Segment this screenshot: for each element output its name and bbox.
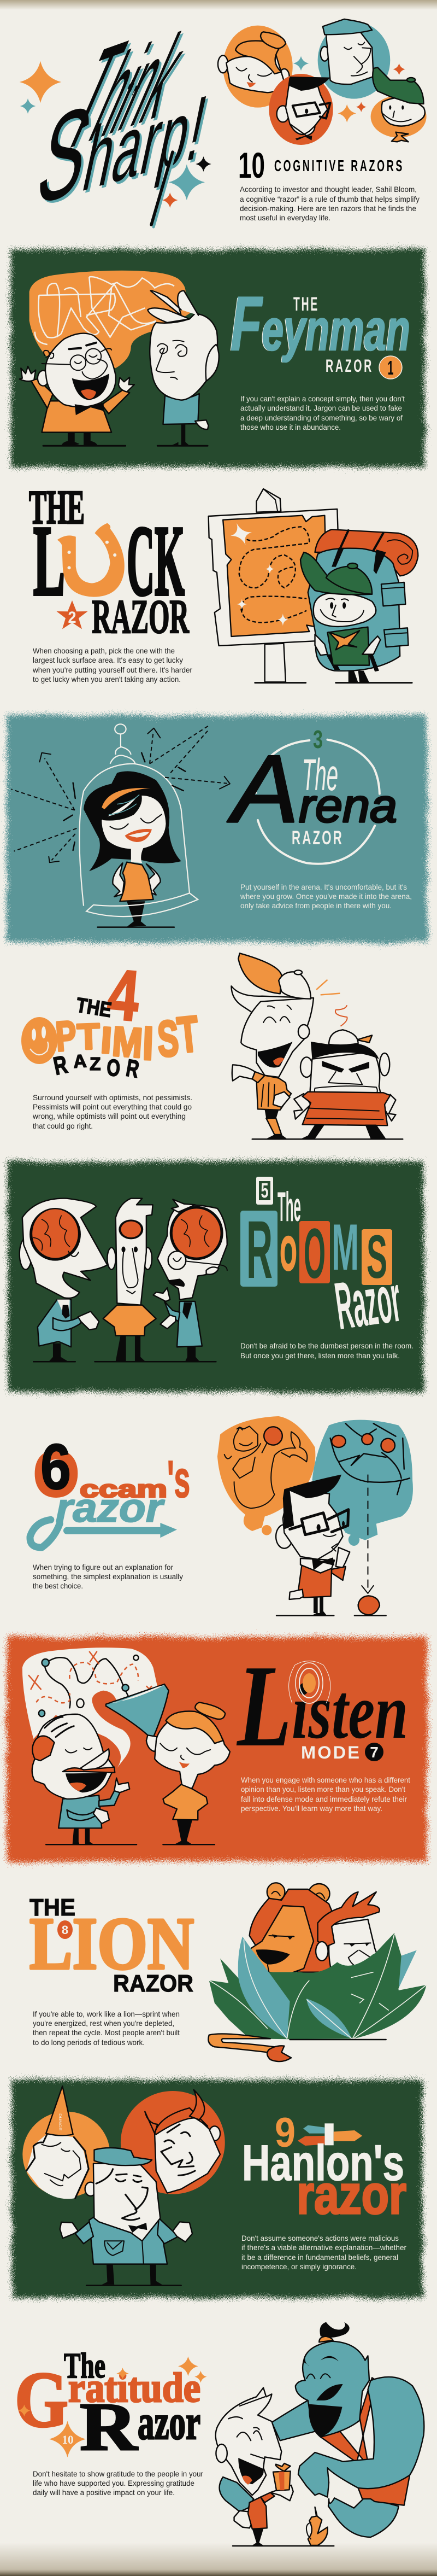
text block: Rooms description: Don't be afraid to be the dumbest person in the room. xyxy=(240,1341,414,1350)
heading: The 4 Optimist Razor: R xyxy=(124,1054,141,1083)
text block: Luck description: largest luck surface area. It's easy to get lucky xyxy=(33,656,183,664)
panel: Hanlon's razor xyxy=(12,2080,423,2298)
heading: 10 cognitive razors xyxy=(238,145,404,185)
heading letters: Optimist: P xyxy=(54,1013,78,1060)
heading: The Lion Razor: RAZOR xyxy=(113,1970,193,1997)
panel: the Luck razor xyxy=(29,481,418,684)
heading: The Gratitude Razor: ratitude xyxy=(68,2365,200,2411)
badge: number 7 xyxy=(365,1743,383,1761)
text block: intro: most useful in everyday life. xyxy=(240,213,330,222)
badge: star number 2 xyxy=(57,600,87,629)
panel background xyxy=(8,1161,424,1392)
heading: The Arena Razor: RAZOR xyxy=(292,827,344,849)
text block: Feynman description: If you can't explain a concept simply, then you don't xyxy=(240,394,405,403)
text block: Listen description: perspective. You'll learn way more that way. xyxy=(241,1804,382,1813)
text block: Hanlon description: it be a difference in fundamental beliefs, general xyxy=(241,2253,398,2262)
heading: The Feynman Razor: RAZOR xyxy=(326,356,374,376)
illustration: thought bubbles, man with glasses, apple xyxy=(217,1416,413,1616)
text block: Hanlon description: Don't assume someone's actions were malicious xyxy=(241,2234,399,2242)
heading: 10 cognitive razors: 10 xyxy=(238,145,265,185)
heading: The Arena Razor: Arena xyxy=(227,736,397,843)
heading: The Lion Razor: LION xyxy=(29,1903,194,1985)
icon: signpost xyxy=(298,2123,362,2146)
text block: Listen description: When you engage with someone who has a different xyxy=(241,1775,410,1784)
text block: Hanlon description xyxy=(241,2234,406,2271)
illustration: stars and four faces xyxy=(20,19,427,208)
badge: number 8: 8 xyxy=(62,1923,68,1937)
heading: The Gratitude Razor xyxy=(15,2346,207,2465)
illustration: dunce, devil and shrugging man xyxy=(22,2086,225,2286)
heading: The Arena Razor: 3 xyxy=(313,725,323,753)
panel: the Rooms razor xyxy=(8,1161,424,1392)
text block: intro: decision-making. Here are ten razors that he finds the xyxy=(240,204,416,213)
text block: Luck description: when you're putting yourself out there. It's harder xyxy=(32,665,192,674)
heading: Listen Mode 7: L xyxy=(236,1640,292,1771)
heading: The 4 Optimist Razor: Z xyxy=(90,1054,101,1074)
icon: woman face xyxy=(218,26,293,108)
heading: The Luck Razor xyxy=(29,481,190,644)
text block: Gratitude description: Don't hesitate to show gratitude to the people in your xyxy=(33,2469,203,2478)
text block: Lion description: then repeat the cycle. Most people aren't built xyxy=(33,2028,180,2037)
text block: Optimist description: wrong, while optimists will point out everything xyxy=(32,1112,186,1120)
heading: 6 Occam's Razor: 's xyxy=(167,1450,190,1509)
badge: number 7: 7 xyxy=(370,1744,379,1761)
heading: 5 The Rooms Razor: O xyxy=(304,1213,326,1293)
panel background xyxy=(7,1637,427,1861)
decorative descender of the p xyxy=(153,153,175,227)
heading: 6 Occam's Razor: razor xyxy=(56,1485,166,1531)
text block: Feynman description: those who use it in abundance. xyxy=(240,423,341,431)
text block: Listen description xyxy=(241,1775,410,1813)
icon: smiley in letter O xyxy=(30,1026,48,1055)
text block: Hanlon description: incompetence, or simply ignorance. xyxy=(241,2262,357,2271)
panel: the Gratitude razor xyxy=(15,2322,424,2546)
heading: 9 Hanlon's Razor xyxy=(242,2110,406,2225)
text block: Feynman description: a deep understanding of something, so be wary of xyxy=(240,413,403,422)
panel: the Feynman razor xyxy=(11,249,425,467)
badge: number 1 xyxy=(379,356,402,379)
icon: scout face xyxy=(371,67,427,142)
text block: Gratitude description: daily will have a positive impact on your life. xyxy=(33,2488,175,2497)
text block: Luck description: When choosing a path, pick the one with the xyxy=(33,646,175,655)
illustration: professor and confused man xyxy=(20,271,219,446)
icon: target rings xyxy=(289,1661,330,1703)
text block: Arena description: Put yourself in the arena. It's uncomfortable, but it's xyxy=(240,883,407,891)
text block: Occam description xyxy=(33,1563,183,1590)
heading: 5 The Rooms Razor xyxy=(240,1177,405,1344)
text block: Optimist description: Surround yourself with optimists, not pessimists. xyxy=(33,1093,192,1102)
text block: Hanlon description: if there's a viable alternative explanation—whether xyxy=(241,2243,406,2252)
illustration: dunce, devil and shrugging man: DUNCE xyxy=(58,2113,62,2130)
heading: The 4 Optimist Razor: A xyxy=(73,1051,87,1072)
icon: man with cap face xyxy=(318,19,390,99)
text block: Luck description xyxy=(32,646,192,684)
panel: the Lion razor xyxy=(29,1883,427,2061)
heading: The 4 Optimist Razor: 4 xyxy=(105,954,143,1036)
panel: the Luck razor: CK xyxy=(127,505,185,616)
heading: 5 The Rooms Razor: O xyxy=(280,1228,297,1280)
badge: number 5: 5 xyxy=(261,1179,269,1202)
illustration: man speaking, funnel, woman listening xyxy=(22,1648,230,1844)
text block: Optimist description xyxy=(32,1093,192,1130)
title: Think Sharp!: Sharp! xyxy=(29,44,225,235)
text block: Optimist description: that could go right. xyxy=(33,1121,93,1130)
illustration: woman in a bell jar with arrows xyxy=(11,724,230,927)
title: Think Sharp!: Sharp! xyxy=(27,42,223,232)
illustration: optimist and pessimist xyxy=(231,953,403,1139)
panel: Occam's razor xyxy=(30,1416,413,1616)
title: Think Sharp!: Think xyxy=(45,0,213,183)
heading: The Lion Razor: THE xyxy=(29,1894,75,1921)
heading: The Gratitude Razor: R xyxy=(80,2390,138,2465)
badge: number 1: 1 xyxy=(388,357,393,379)
icon: glasses man face xyxy=(269,74,333,145)
heading: The 4 Optimist Razor xyxy=(22,954,202,1083)
heading: The Gratitude Razor: The xyxy=(64,2346,105,2386)
text block: Gratitude description: life who have supported you. Expressing gratitude xyxy=(33,2479,194,2487)
heading: The Gratitude Razor: G xyxy=(15,2356,68,2444)
badge: number 10: 10 xyxy=(62,2433,73,2446)
heading: The 4 Optimist Razor: THE xyxy=(75,994,113,1022)
text block: Optimist description: Pessimists will point out everything that could go xyxy=(33,1102,192,1111)
illustration: signpost, map and scout with backpack xyxy=(209,489,418,683)
heading: 9 Hanlon's Razor: 9 xyxy=(275,2110,296,2156)
heading: 5 The Rooms Razor: The xyxy=(277,1184,301,1230)
text block: Gratitude description xyxy=(33,2469,203,2497)
panel: the Arena razor xyxy=(7,715,427,942)
heading: The Luck Razor: L xyxy=(33,505,65,616)
heading letters: Optimist: T xyxy=(175,1005,202,1064)
illustration: lion and man in leaves xyxy=(208,1883,427,2061)
heading: 5 The Rooms Razor: M xyxy=(332,1211,359,1284)
text block: Luck description: to get lucky when you aren't taking any action. xyxy=(33,675,181,684)
text block: intro: a cognitive “razor” is a rule of thumb that helps simplify xyxy=(240,195,420,203)
heading: The Feynman Razor: THE xyxy=(293,294,319,315)
heading: Listen Mode 7 xyxy=(236,1640,408,1771)
heading: The Gratitude Razor: azor xyxy=(138,2396,200,2450)
text block: Feynman description: actually understand it. Jargon can be used to fake xyxy=(240,404,402,412)
heading: 5 The Rooms Razor: R xyxy=(246,1204,273,1295)
text block: Lion description: If you're able to, work like a lion—sprint when xyxy=(33,2010,180,2018)
heading: The Arena Razor: The xyxy=(302,750,338,800)
heading letters: Optimist: S xyxy=(156,1010,180,1067)
icons: sparkle stars xyxy=(18,2356,207,2457)
text block: Arena description xyxy=(240,883,412,910)
heading: 6 Occam's Razor: ccam xyxy=(80,1476,167,1503)
text block: Lion description: you're energized, rest when you're depleted, xyxy=(33,2019,174,2028)
panel background xyxy=(7,715,427,942)
text block: intro: According to investor and thought leader, Sahil Bloom, xyxy=(240,185,417,194)
text block: Occam description: When trying to figure out an explanation for xyxy=(33,1563,173,1572)
heading letters: Optimist: I xyxy=(99,1019,113,1061)
title: Think Sharp!: Think xyxy=(48,0,215,185)
heading: 5 The Rooms Razor: S xyxy=(367,1223,387,1291)
section: header xyxy=(20,0,427,235)
text block: Rooms description: But once you get there, listen more than you talk. xyxy=(240,1351,400,1360)
illustration: genie and smiling man with gift xyxy=(216,2322,424,2546)
heading letters: Optimist: M xyxy=(111,1019,144,1067)
heading: Listen Mode 7: MODE xyxy=(301,1743,361,1762)
text block: Listen description: opinion than you, listen more than you speak. Don't xyxy=(241,1785,405,1794)
heading: 6 Occam's Razor: O xyxy=(33,1438,79,1510)
heading: 6 Occam's Razor: 6 xyxy=(40,1431,71,1503)
heading: 6 Occam's Razor xyxy=(33,1431,190,1531)
heading letters: Optimist: I xyxy=(141,1017,155,1070)
text block: Occam description: the best choice. xyxy=(33,1581,83,1590)
heading letters: Optimist: O xyxy=(22,1007,56,1074)
arrow: razor swash xyxy=(30,1520,177,1547)
panel: Listen mode xyxy=(7,1637,427,1861)
badge: number 8 xyxy=(57,1920,73,1939)
title: Think Sharp! xyxy=(27,0,225,235)
heading: The Luck Razor: THE xyxy=(29,481,85,534)
text block: Rooms description xyxy=(240,1341,414,1360)
text block: Arena description: only take advice from people in there with you. xyxy=(240,901,392,910)
badge: number 5 xyxy=(256,1177,273,1205)
text block: Arena description: where you grow. Once you've made it into the arena, xyxy=(240,892,412,901)
heading: The 4 Optimist Razor: R xyxy=(51,1050,70,1080)
panel background xyxy=(11,249,425,467)
heading: 9 Hanlon's Razor: razor xyxy=(297,2164,406,2225)
badge: star number 2: 2 xyxy=(68,609,76,627)
text block: Lion description: to do long periods of tedious work. xyxy=(33,2038,145,2047)
heading: The Luck Razor: RAZOR xyxy=(92,591,190,644)
icon: horseshoe letter U xyxy=(57,523,125,597)
text block: Occam description: something, the simplest explanation is usually xyxy=(33,1572,183,1581)
text block: intro xyxy=(240,185,420,222)
text block: Listen description: fall into defense mode and immediately refute their xyxy=(241,1795,407,1803)
panel: the Optimist razor xyxy=(22,953,403,1139)
heading letters: Optimist: T xyxy=(76,1016,101,1058)
illustration: three men with brains xyxy=(20,1199,227,1362)
heading: The 4 Optimist Razor: O xyxy=(107,1054,121,1081)
heading letters: Optimist xyxy=(22,1005,202,1074)
text block: Feynman description xyxy=(240,394,405,431)
panel background xyxy=(12,2080,423,2298)
text block: Lion description xyxy=(33,2010,180,2047)
